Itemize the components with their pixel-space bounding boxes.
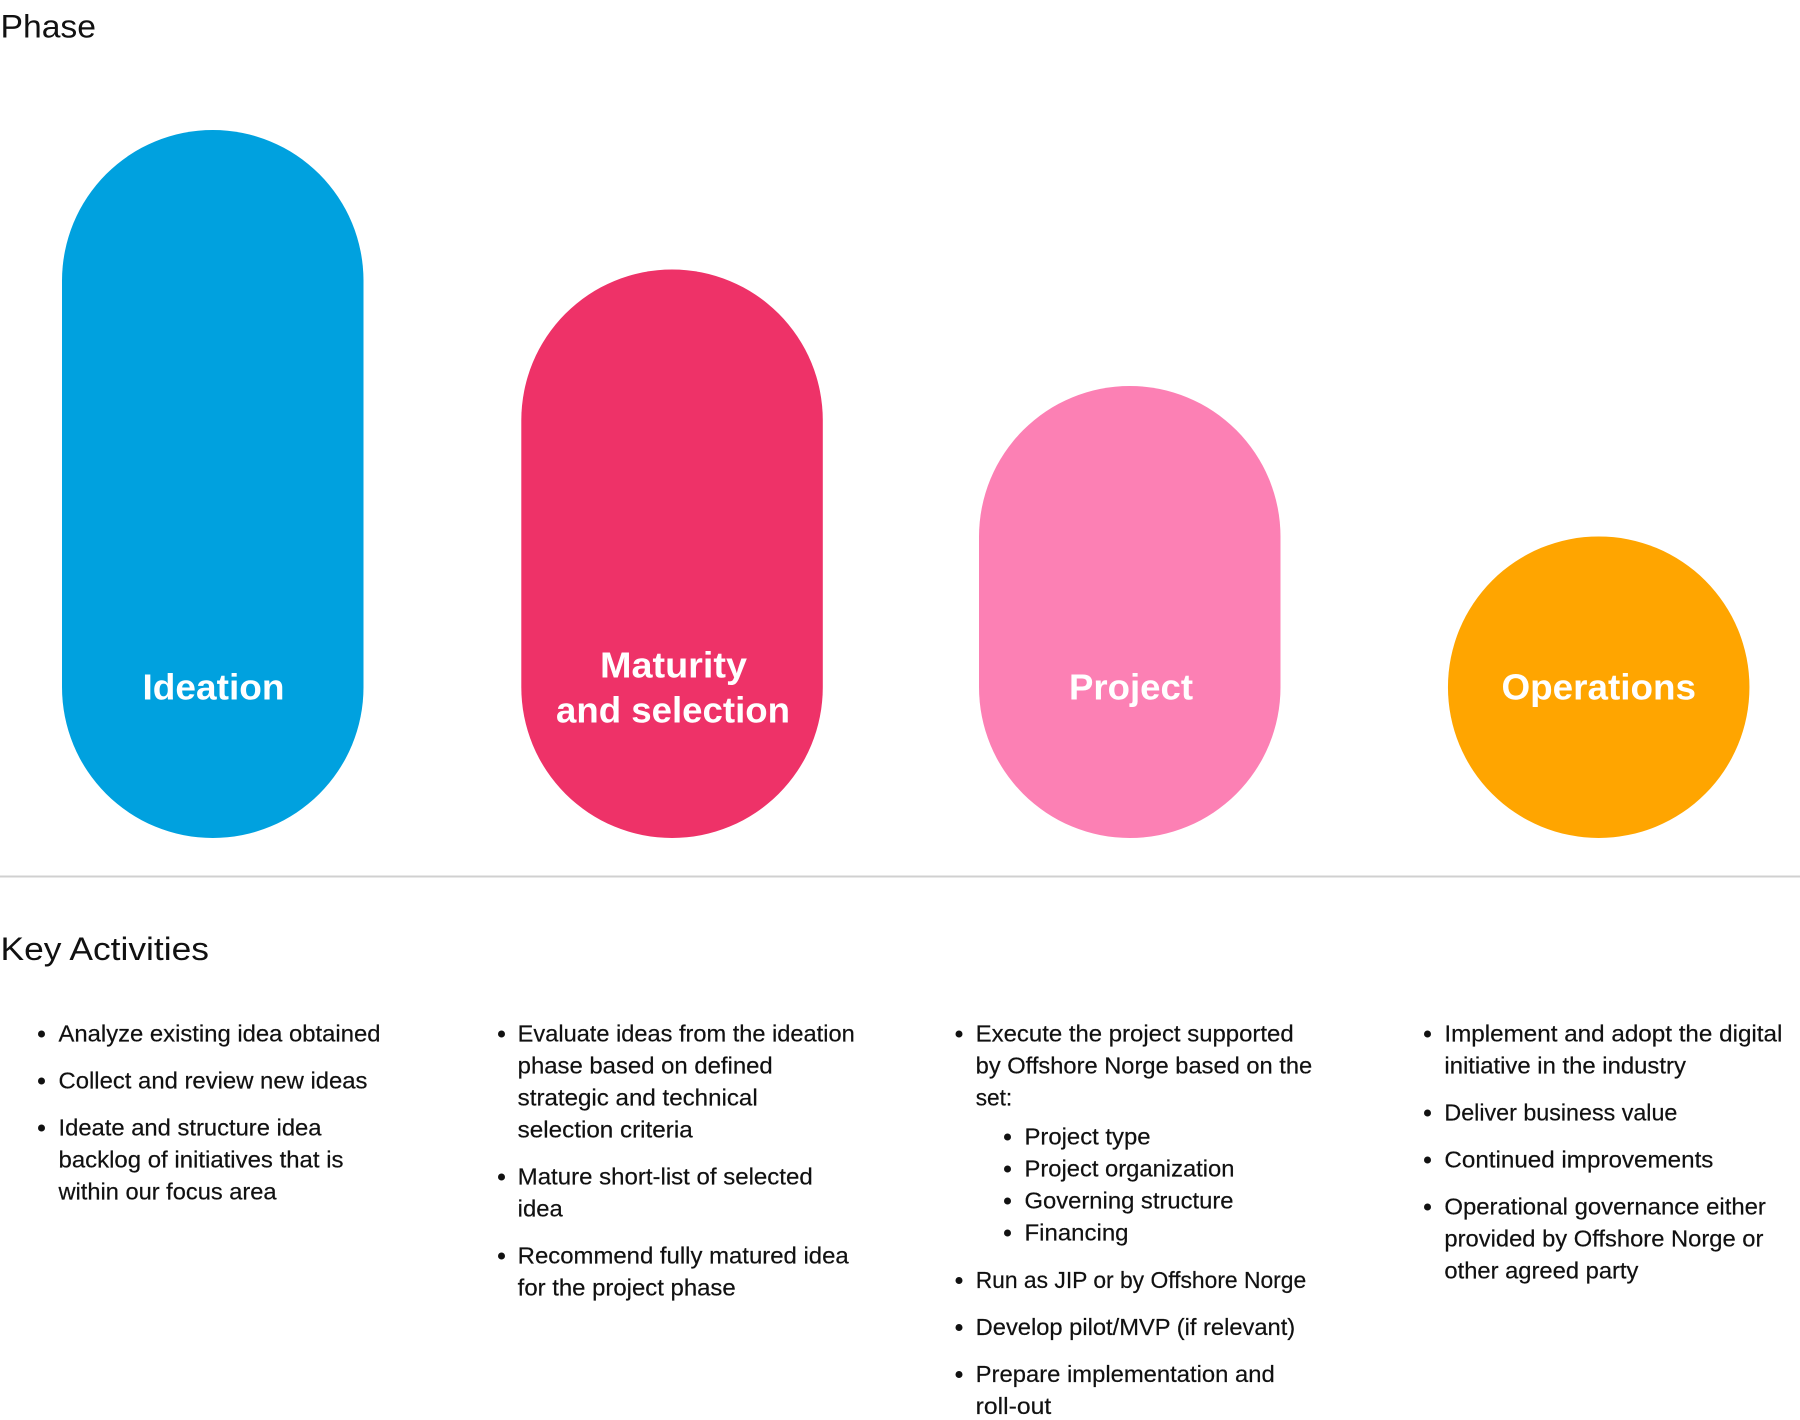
bullet: Evaluate ideas: phase based on defined <box>518 1053 773 1079</box>
bullet: Implement and adopt: initiative in the industry <box>1444 1053 1686 1079</box>
bullet: Run as JIP: Run as JIP or by Offshore Norge <box>976 1267 1306 1293</box>
phase pill: Maturity and selection <box>521 270 823 838</box>
bullet: Mature short-list: Mature short-list of selected <box>518 1164 813 1190</box>
bullet: Prepare implementation <box>956 1361 1275 1419</box>
bullet: Continued improvements: Continued improvements <box>1444 1147 1713 1173</box>
bullet: Operational governance: provided by Offshore Norge or <box>1444 1226 1764 1252</box>
sub-list: project set: Governing structure <box>1024 1188 1234 1214</box>
bullet: Execute the project: by Offshore Norge based on the <box>976 1053 1312 1079</box>
sub-list: project set: Project organization <box>1024 1156 1234 1182</box>
bullet: Develop pilot: Develop pilot/MVP (if relevant) <box>976 1314 1295 1340</box>
sub-list: project set <box>1004 1124 1234 1246</box>
bullet: Prepare implementation: Prepare implementation and <box>976 1361 1275 1387</box>
sub-list: project set: Financing <box>1024 1220 1128 1246</box>
bullet: Ideate and structure <box>38 1115 344 1205</box>
bullet: Operational governance <box>1424 1194 1766 1284</box>
bullet: Collect and review: Collect and review new ideas <box>58 1068 368 1094</box>
bullet: Execute the project: set: <box>976 1085 1012 1111</box>
phase pill: Maturity and selection: Maturity <box>600 645 747 686</box>
bullet: Deliver business value: Deliver business value <box>1444 1100 1677 1126</box>
bullet: Recommend <box>498 1243 849 1301</box>
heading: Key Activities: Key Activities <box>0 931 209 967</box>
bullet: Recommend: Recommend fully matured idea <box>518 1243 849 1269</box>
bullet: Operational governance: other agreed party <box>1444 1258 1639 1284</box>
activities list: Maturity and selection <box>498 1021 855 1301</box>
activities list: Operations <box>1424 1021 1782 1284</box>
bullet: Operational governance: Operational governance either <box>1444 1194 1766 1220</box>
bullet: Analyze existing idea: Analyze existing idea obtained <box>58 1021 380 1047</box>
phase circle: Operations <box>1448 536 1749 838</box>
activities list: Project <box>956 1021 1312 1419</box>
bullet: Mature short-list: idea <box>518 1196 563 1222</box>
phase pill: Maturity and selection: and selection <box>556 690 790 730</box>
bullet: Recommend: for the project phase <box>518 1275 736 1301</box>
bullet: Ideate and structure: within our focus area <box>57 1179 277 1205</box>
phase pill: Ideation: Ideation <box>142 666 284 708</box>
bullet: Execute the project: Execute the project supported <box>976 1021 1294 1047</box>
bullet: Evaluate ideas: strategic and technical <box>518 1085 758 1111</box>
bullet: Implement and adopt <box>1424 1021 1782 1079</box>
phase circle: Operations: Operations <box>1502 666 1696 708</box>
sub-list: project set: Project type <box>1024 1124 1150 1150</box>
bullet: Evaluate ideas <box>498 1021 855 1143</box>
bullet: Evaluate ideas: Evaluate ideas from the ideation <box>518 1021 855 1047</box>
bullet: Ideate and structure: Ideate and structure idea <box>58 1115 322 1141</box>
bullet: Prepare implementation: roll-out <box>976 1393 1052 1419</box>
phase pill: Project <box>979 386 1280 838</box>
phase pill: Ideation <box>62 130 364 838</box>
bullet: Execute the project <box>956 1021 1312 1111</box>
bullet: Mature short-list <box>498 1164 813 1222</box>
phase pill: Project: Project <box>1069 666 1193 708</box>
activities list: Ideation <box>38 1021 380 1205</box>
bullet: Evaluate ideas: selection criteria <box>518 1117 693 1143</box>
heading: Phase: Phase <box>0 8 96 44</box>
bullet: Implement and adopt: Implement and adopt the digital <box>1444 1021 1782 1047</box>
bullet: Ideate and structure: backlog of initiatives that is <box>58 1147 344 1173</box>
